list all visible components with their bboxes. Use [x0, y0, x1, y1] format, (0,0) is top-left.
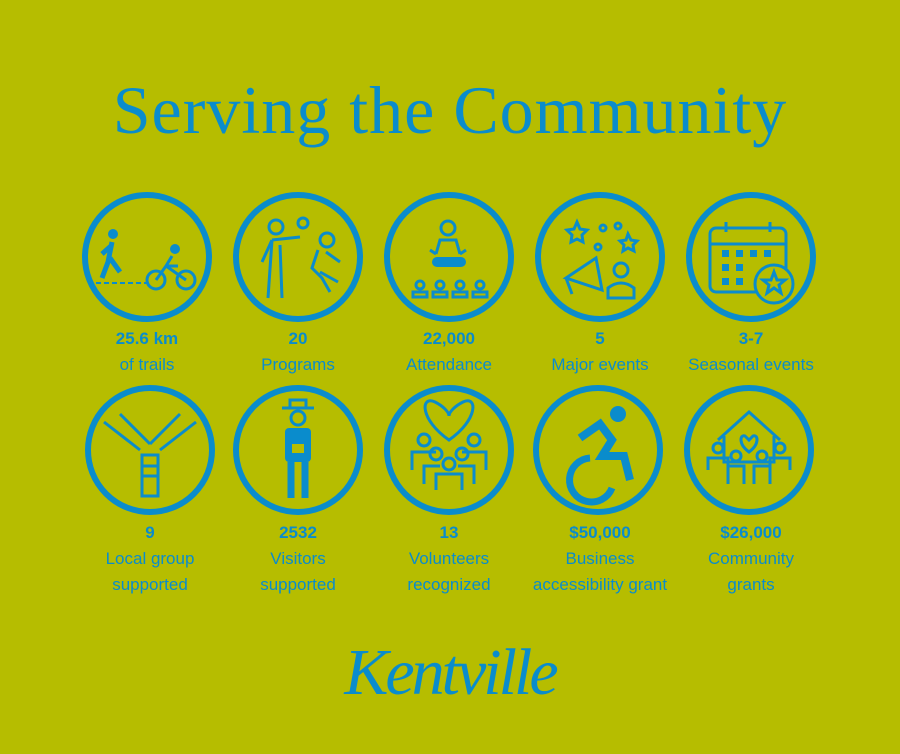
label: programs: Programs: [261, 355, 335, 374]
label: trails: 25.6 km: [116, 329, 178, 348]
label: seasonal events: [688, 329, 814, 374]
icon: major events: [538, 195, 662, 319]
icon: programs: [236, 195, 360, 319]
label: trails: [116, 329, 178, 374]
label: visitors: Visitors: [270, 549, 326, 568]
label: programs: [261, 329, 335, 374]
icon: accessibility: [536, 388, 660, 512]
label: attendance: 22,000: [423, 329, 475, 348]
label: volunteers: 13: [440, 523, 458, 542]
title: Serving the Community: [113, 72, 787, 148]
label: volunteers: Volunteers: [409, 549, 489, 568]
icon: trails: [85, 195, 209, 319]
label: attendance: [406, 329, 492, 374]
icon: community grants: [687, 388, 811, 512]
icon: local groups: [88, 388, 212, 512]
label: community grants: [708, 523, 794, 594]
label: visitors: [260, 523, 336, 594]
label: seasonal events: 3-7: [739, 329, 763, 348]
icon: visitors: [236, 388, 360, 512]
label: local groups: Local group: [106, 549, 194, 568]
icon: seasonal events: [689, 195, 813, 319]
label: attendance: Attendance: [406, 355, 492, 374]
label: seasonal events: Seasonal events: [688, 355, 814, 374]
icon: attendance: [387, 195, 511, 319]
label: volunteers: recognized: [407, 575, 491, 594]
label: local groups: supported: [112, 575, 188, 594]
label: local groups: [106, 523, 194, 594]
label: programs: 20: [289, 329, 307, 348]
label: business grant: [533, 523, 667, 594]
label: community grants: $26,000: [720, 523, 782, 542]
label: major events: Major events: [551, 355, 649, 374]
label: trails: of trails: [120, 355, 174, 374]
icon: volunteers: [387, 388, 511, 512]
label: major events: 5: [595, 329, 605, 348]
label: community grants: Community: [708, 549, 794, 568]
logo: Kentville: [344, 636, 556, 709]
label: business grant: $50,000: [569, 523, 631, 542]
label: business grant: Business: [566, 549, 634, 568]
label: visitors: 2532: [279, 523, 317, 542]
label: major events: [551, 329, 649, 374]
label: volunteers: [407, 523, 491, 594]
label: community grants: grants: [727, 575, 775, 594]
label: visitors: supported: [260, 575, 336, 594]
label: business grant: accessibility grant: [533, 575, 667, 594]
label: local groups: 9: [145, 523, 155, 542]
